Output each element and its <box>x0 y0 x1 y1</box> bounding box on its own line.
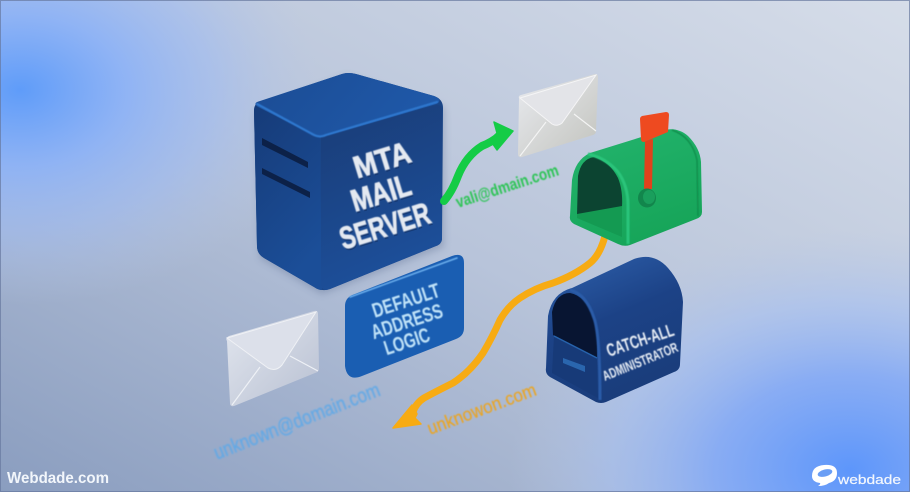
panel: default address logic <box>345 255 464 378</box>
icon: MTA mail server cube <box>254 73 444 294</box>
mailbox pole <box>644 139 653 190</box>
server label: MAIL <box>348 169 416 221</box>
server slot 1 <box>262 138 308 168</box>
label: unknown address: unknown@domain.com <box>211 379 384 465</box>
footer: site name: Webdade.com <box>7 470 109 487</box>
catch-all label: ADMINISTRATOR <box>600 339 680 384</box>
catch-all door <box>552 336 598 398</box>
mailbox floor <box>577 206 622 237</box>
server label: SERVER <box>335 196 435 256</box>
panel: default address logic: LOGIC <box>381 324 433 360</box>
server label: MTA <box>349 135 415 185</box>
icon: delivered envelope <box>518 74 598 157</box>
catch-all handle <box>563 358 585 372</box>
panel: default address logic: ADDRESS <box>368 299 446 344</box>
server label: MTA <box>350 137 416 187</box>
server top face <box>255 73 440 137</box>
icon: catch-all mailbox <box>546 257 683 403</box>
server label <box>335 135 436 258</box>
server label: MAIL <box>347 167 415 219</box>
logo: webdade <box>812 465 901 487</box>
server front face <box>321 105 442 290</box>
mailbox body <box>570 129 702 246</box>
label: unknown route address: unknowon.com <box>424 380 539 439</box>
catch-all opening <box>552 293 597 358</box>
arrow: valid delivery <box>444 122 513 201</box>
catch-all label: CATCH-ALL <box>604 320 677 361</box>
arrow: catch-all route <box>393 236 605 428</box>
label: valid address: vali@dmain.com <box>453 161 561 212</box>
mailbox knob <box>638 188 656 208</box>
logo mark <box>812 465 837 486</box>
mailbox flag <box>640 112 669 142</box>
icon: green mailbox <box>570 112 702 246</box>
panel: default address logic: DEFAULT <box>369 279 443 323</box>
server slot 2 <box>262 168 310 198</box>
mailbox opening <box>577 157 622 215</box>
server left face <box>254 105 322 290</box>
icon: incoming envelope <box>226 311 319 406</box>
server label: SERVER <box>336 198 436 258</box>
catch-all label <box>600 320 680 384</box>
logo wordmark: webdade <box>837 472 901 487</box>
